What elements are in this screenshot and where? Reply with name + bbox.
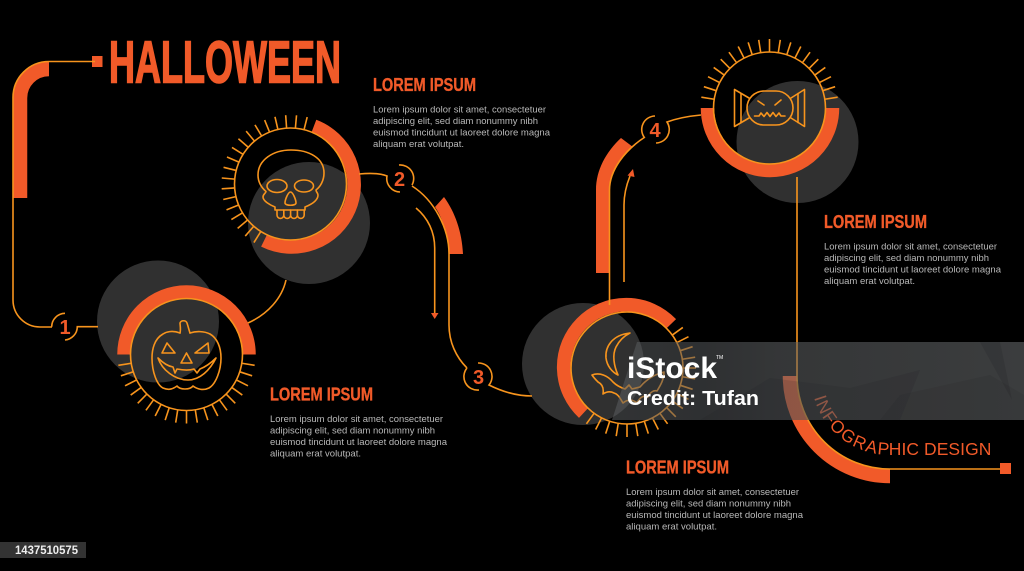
icon: pumpkin	[152, 321, 221, 389]
icon: skull	[258, 150, 324, 218]
title: HALLOWEEN	[109, 28, 341, 96]
text block: step 2: adipiscing elit, sed diam nonummy nibh	[373, 116, 538, 126]
step 4 number marker: 4	[649, 120, 661, 142]
text block: step 1	[270, 384, 448, 458]
text block: step 3: Lorem ipsum dolor sit amet, consectetuer	[626, 487, 799, 497]
text block: step 2: aliquam erat volutpat.	[373, 139, 464, 149]
curved subtitle: infographic design: INFOGRAPHIC DESIGN	[814, 395, 990, 455]
watermark text: Credit: Tufan	[627, 388, 759, 410]
text block: step 1: adipiscing elit, sed diam nonummy nibh	[270, 426, 435, 436]
gray circle: skull step	[248, 162, 370, 284]
text block: step 3: LOREM IPSUM	[626, 458, 729, 478]
image id tag	[0, 542, 86, 558]
title connector with square end and thick corner	[13, 56, 102, 327]
skull step ring	[222, 115, 354, 247]
gray circle: pumpkin step	[97, 260, 219, 382]
text block: step 4: Lorem ipsum dolor sit amet, consectetuer	[824, 242, 997, 252]
candy step ring	[701, 39, 838, 171]
text block: step 1: aliquam erat volutpat.	[270, 448, 361, 458]
text block: step 4	[824, 212, 1002, 286]
arrow down	[416, 208, 438, 319]
watermark text	[627, 352, 759, 410]
arrow up	[624, 169, 634, 282]
bat step ring	[564, 305, 696, 437]
text block: step 3: euismod tincidunt ut laoreet dolore magna	[626, 510, 804, 520]
watermark band	[612, 342, 1024, 420]
text block: step 2: Lorem ipsum dolor sit amet, consectetuer	[373, 104, 546, 114]
icon: moon and bat	[592, 333, 664, 403]
step 4 number marker	[642, 115, 701, 143]
text block: step 1: Lorem ipsum dolor sit amet, consectetuer	[270, 414, 443, 424]
text block: step 3	[626, 458, 804, 532]
connector pumpkin to skull	[248, 280, 286, 323]
text block: step 2	[373, 75, 551, 149]
text block: step 1: euismod tincidunt ut laoreet dolore magna	[270, 437, 448, 447]
connector up to step 4 with band	[596, 137, 645, 305]
text block: step 2: LOREM IPSUM	[373, 75, 476, 95]
text block: step 4: LOREM IPSUM	[824, 212, 927, 232]
step 3 number marker	[464, 363, 532, 396]
step 1 number marker: 1	[59, 317, 71, 339]
connector 2 to 3 with arc band	[412, 186, 467, 368]
watermark text: iStock	[627, 352, 717, 385]
pumpkin step ring	[118, 292, 255, 424]
image id tag: 1437510575	[15, 545, 79, 557]
gray circle: candy step	[736, 81, 858, 203]
text block: step 1: LOREM IPSUM	[270, 384, 373, 404]
text block: step 3: adipiscing elit, sed diam nonummy nibh	[626, 498, 791, 508]
icon: angry candy	[734, 90, 804, 126]
connector candy to design corner	[790, 177, 1011, 476]
step 3 number marker: 3	[473, 367, 484, 389]
text block: step 4: euismod tincidunt ut laoreet dolore magna	[824, 264, 1002, 274]
watermark text: TM	[716, 355, 723, 361]
step 2 number marker: 2	[394, 169, 405, 191]
step 1 number marker	[52, 313, 98, 340]
text block: step 4: adipiscing elit, sed diam nonummy nibh	[824, 253, 989, 263]
step 2 number marker	[359, 165, 414, 192]
gray circle: bat step	[522, 303, 644, 425]
text block: step 3: aliquam erat volutpat.	[626, 522, 717, 532]
text block: step 4: aliquam erat volutpat.	[824, 276, 915, 286]
text block: step 2: euismod tincidunt ut laoreet dolore magna	[373, 128, 551, 138]
